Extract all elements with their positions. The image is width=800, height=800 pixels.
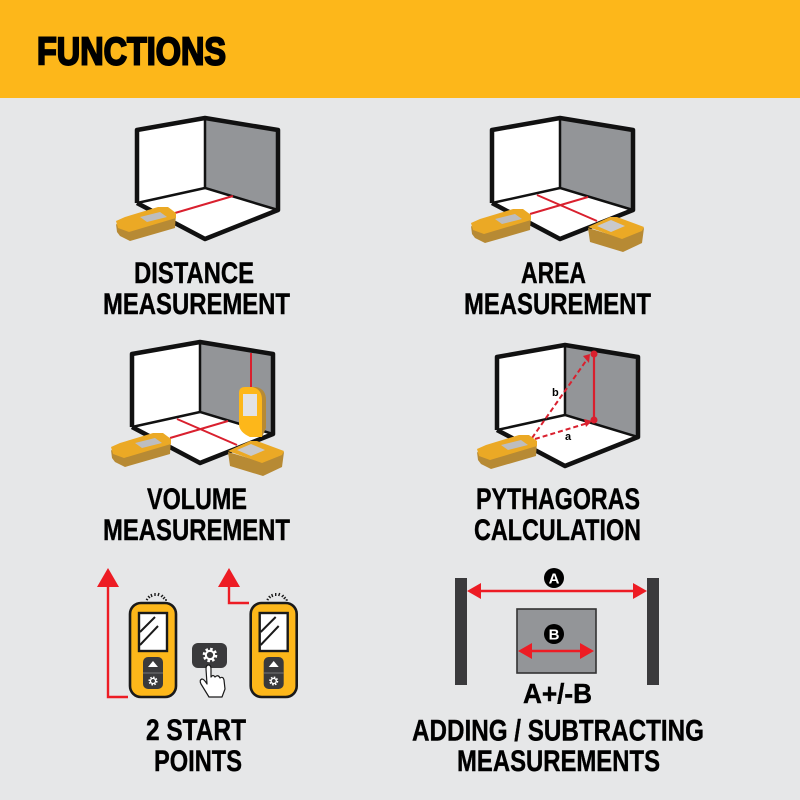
label: 2 start points: 2 START: [146, 714, 246, 747]
panel: area measurement: [464, 118, 651, 321]
label: distance measurement: [103, 257, 290, 321]
arrow: long red arrow: [97, 568, 128, 697]
panel: adding / subtracting measurements: [412, 568, 704, 778]
icon: room with one laser device: [116, 118, 278, 241]
label: adding / subtracting measurements: MEASUREMENTS: [457, 745, 660, 778]
icon: laser meter rear reference: [130, 593, 176, 697]
label: volume measurement: [103, 483, 290, 547]
label: area measurement: [464, 257, 651, 321]
icon: walls with measurement A: A: [549, 570, 560, 588]
label: pythagoras calculation: CALCULATION: [474, 514, 641, 547]
arrow: short red arrow: [218, 568, 249, 603]
label: area measurement: MEASUREMENT: [464, 288, 651, 321]
panel: distance measurement: [103, 118, 290, 321]
icon: room with triangle measurement: [477, 345, 638, 469]
formula: A+/-B: [523, 678, 592, 709]
panel: pythagoras calculation: [474, 345, 641, 547]
header band: [0, 0, 800, 98]
icon: room with three laser devices: [111, 342, 284, 476]
label: volume measurement: MEASUREMENT: [103, 514, 290, 547]
panel: 2 start points: [97, 568, 297, 778]
label: distance measurement: MEASUREMENT: [103, 288, 290, 321]
label: 2 start points: [146, 714, 246, 778]
icon: room with triangle measurement: a: [565, 431, 572, 443]
icon: box with measurement B: B: [549, 626, 560, 644]
label: adding / subtracting measurements: ADDING / SUBTRACTING: [412, 714, 704, 748]
label: distance measurement: DISTANCE: [134, 257, 254, 290]
panel: volume measurement: [103, 342, 290, 547]
icon: walls with measurement A: [455, 568, 659, 685]
label: volume measurement: VOLUME: [147, 483, 247, 516]
label: 2 start points: POINTS: [154, 745, 242, 778]
label: area measurement: AREA: [521, 257, 586, 290]
icon: room with two laser devices: [471, 118, 644, 252]
icon: settings button with hand: [192, 643, 227, 697]
icon: laser meter front reference: [251, 593, 297, 697]
icon: room with triangle measurement: b: [552, 387, 559, 399]
label: pythagoras calculation: [474, 483, 641, 547]
icon: box with measurement B: [517, 609, 596, 673]
label: adding / subtracting measurements: [412, 714, 704, 778]
label: pythagoras calculation: PYTHAGORAS: [476, 483, 640, 516]
title: FUNCTIONS: [37, 30, 226, 74]
